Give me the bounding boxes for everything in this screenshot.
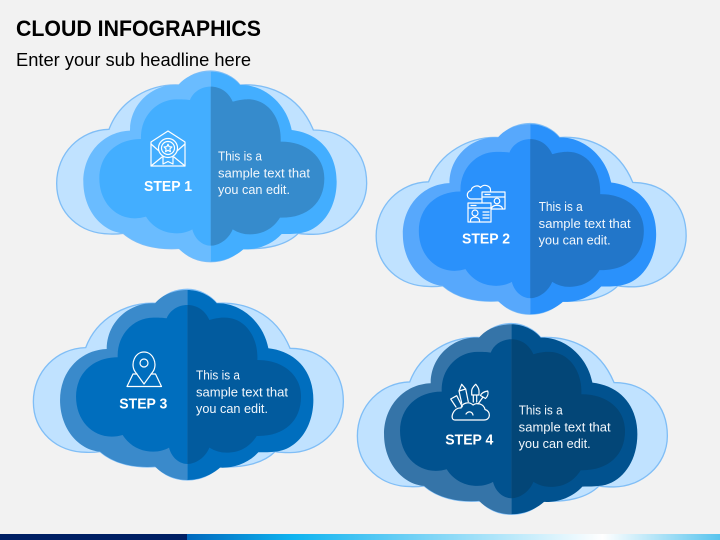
step 3 text (196, 368, 289, 416)
step 3 text: you can edit. (196, 402, 268, 416)
step 4 text: you can edit. (519, 437, 591, 451)
icon: award envelope (151, 131, 185, 166)
step 4 text: sample text that (519, 420, 611, 434)
step 2 text: you can edit. (539, 234, 611, 248)
icon: cloud profiles (467, 185, 505, 222)
step 2 text: sample text that (539, 217, 631, 231)
cloud shape 2 (376, 123, 686, 314)
cloud shape 3 (33, 289, 343, 480)
step 2 text: This is a (539, 200, 583, 214)
subtitle: Enter your sub headline here (16, 50, 251, 70)
panel: step 1 cloud (57, 71, 367, 262)
step 2 label: STEP 2 (462, 230, 510, 248)
title: CLOUD INFOGRAPHICS (16, 16, 261, 41)
step 3 label: STEP 3 (119, 396, 167, 412)
panel: step 3 cloud (33, 289, 343, 480)
step 1 label: STEP 1 (144, 178, 192, 195)
step 1 text: sample text that (218, 166, 311, 180)
step 1 text: you can edit. (218, 183, 290, 197)
step 2 text (539, 200, 631, 248)
panel: step 4 cloud (357, 324, 667, 514)
cloud shape 4 (357, 324, 667, 514)
step 4 label: STEP 4 (445, 432, 494, 448)
step 3 text: sample text that (196, 386, 289, 400)
step 1 text: This is a (218, 150, 262, 164)
icon: art tools (451, 384, 489, 420)
step 1 text (218, 150, 311, 197)
icon: map pin (127, 352, 162, 386)
step 4 text: This is a (519, 404, 563, 418)
panel: step 2 cloud (376, 123, 686, 314)
step 3 text: This is a (196, 368, 240, 382)
footer bar (0, 534, 720, 540)
cloud shape 1 (57, 71, 367, 262)
step 4 text (519, 404, 611, 451)
